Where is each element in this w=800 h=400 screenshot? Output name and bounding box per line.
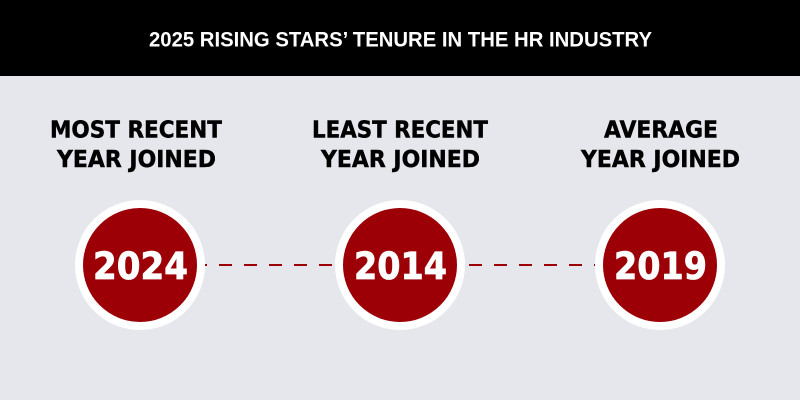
dashed connector line: [205, 264, 596, 266]
heading: least recent year joined: [312, 116, 488, 173]
title banner: 2025 RISING STARS’ TENURE IN THE HR INDUSTRY: [149, 26, 653, 52]
circle: 2014: [339, 204, 461, 326]
circle: 2024: 2024: [93, 245, 188, 288]
heading: most recent year joined: [50, 116, 222, 173]
heading: average year joined: YEAR JOINED: [580, 146, 740, 173]
circle: 2019: 2019: [614, 245, 707, 288]
title banner: [0, 0, 800, 76]
heading: average year joined: AVERAGE: [604, 116, 718, 144]
circle: 2024: [79, 204, 201, 326]
heading: most recent year joined: YEAR JOINED: [56, 146, 216, 173]
circle: 2014: 2014: [354, 245, 447, 288]
heading: least recent year joined: YEAR JOINED: [320, 146, 480, 173]
heading: most recent year joined: MOST RECENT: [50, 116, 222, 144]
heading: least recent year joined: LEAST RECENT: [312, 116, 488, 144]
circle: 2019: [599, 204, 721, 326]
heading: average year joined: [580, 116, 740, 173]
